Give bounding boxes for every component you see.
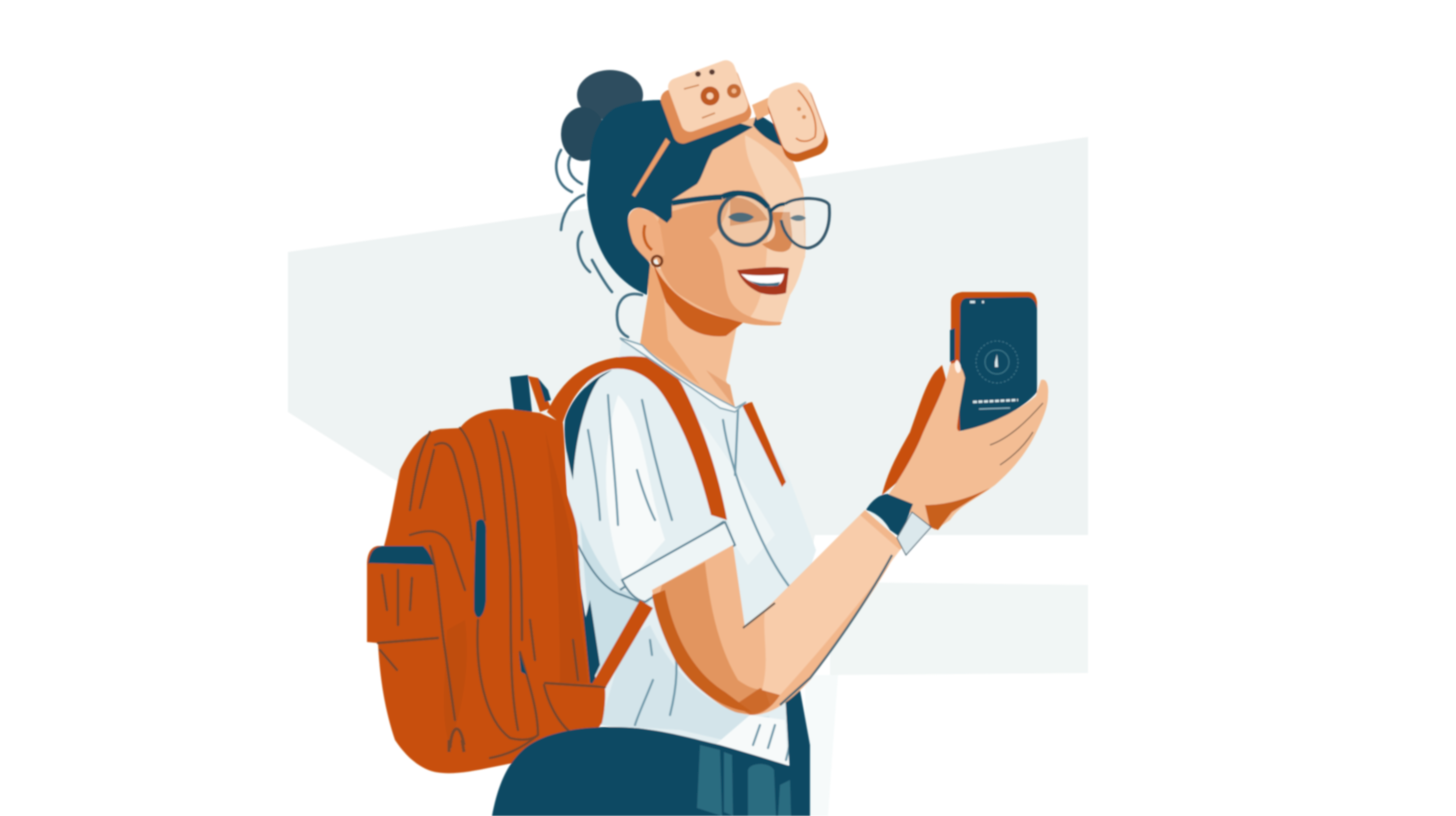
backpack handle — [510, 375, 551, 412]
glasses — [672, 193, 829, 248]
hair buns and wisps — [556, 70, 643, 337]
hair — [587, 100, 788, 295]
hand holding phone — [882, 360, 1048, 530]
face — [628, 117, 806, 326]
smartwatch — [866, 494, 931, 555]
smile — [737, 267, 789, 295]
white shirt — [565, 340, 816, 766]
shirt collar — [620, 338, 746, 412]
trousers and belt — [492, 690, 810, 816]
phone — [950, 292, 1037, 432]
backpack body — [367, 409, 605, 773]
neck — [640, 255, 745, 410]
earring — [652, 256, 662, 266]
headband and camera ornaments — [632, 58, 832, 197]
camera ornament 1 — [658, 58, 754, 146]
backpack strap over shoulder — [547, 356, 786, 687]
background angular panel — [288, 137, 1088, 816]
camera ornament 2 — [764, 79, 832, 166]
arm — [652, 510, 905, 715]
